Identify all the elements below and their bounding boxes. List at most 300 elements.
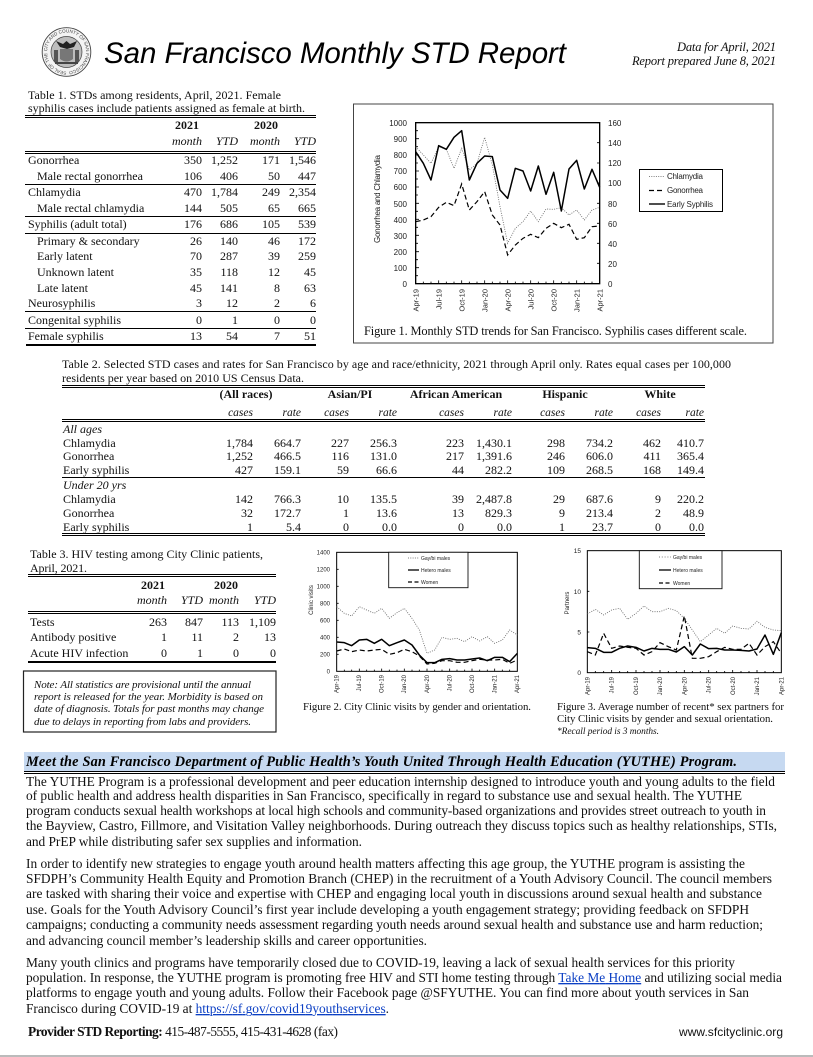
figure 1 x axis labels: Apr-19: [412, 289, 420, 312]
icon: city and county seal: SEAL OF THE CITY AND COUNTY OF SAN FRANCISCO: [44, 29, 90, 75]
report dates: [631, 40, 776, 68]
figure 1 left axis labels: 600: [394, 183, 408, 192]
row: Early syphilis all ages: 109: [547, 463, 565, 477]
figure 1 left axis labels: 700: [394, 167, 408, 176]
figure 3 caption: [557, 701, 784, 737]
article paragraph 2: use. Goals for the Youth Advisory Council’s first year include developing a youth engagement strategy; providing feedback on SFDPH: [26, 902, 749, 917]
figure 3 x axis labels: Apr-21: [780, 676, 786, 695]
figure 1 x axis labels: Oct-20: [550, 289, 558, 312]
row: Late latent: 8: [274, 281, 280, 295]
row: Gonorrhea under 20: 13: [452, 506, 464, 520]
row: Tests: 1,109: [249, 615, 276, 629]
figure 2 y axis labels: 1200: [317, 568, 331, 574]
row: Acute HIV infection: 0: [233, 646, 239, 660]
row: Chlamydia all ages: 410.7: [677, 436, 704, 450]
table 2 caption: Table 2. Selected STD cases and rates for San Francisco by age and race/ethnicity, 2021 through April only. Rates equal cases per 100,000: [62, 357, 731, 371]
row: Late latent: [37, 281, 316, 295]
table 2 column headers: cases: [324, 407, 350, 419]
row: Male rectal gonorrhea: Male rectal gonorrhea: [37, 169, 144, 183]
figure 3 y axis labels: [574, 548, 581, 677]
row: Gonorrhea under 20: 13.6: [376, 506, 397, 520]
row: Early syphilis under 20: [63, 520, 704, 534]
table 3 column headers: 2021: [141, 578, 165, 592]
figure 3 line chart: [587, 551, 781, 673]
figure 3 legend: Gay/bi males: [673, 555, 703, 561]
row: Chlamydia: 2,354: [289, 185, 316, 199]
figure 1 right axis labels: [608, 119, 622, 289]
table 2 column headers: rate: [685, 407, 704, 419]
figure 3 x axis labels: Jan-20: [658, 676, 664, 695]
table 2 group headers: Asian/PI: [328, 387, 373, 401]
table 3 column headers: YTD: [254, 593, 276, 607]
row: Acute HIV infection: Acute HIV infection: [30, 646, 128, 660]
figure 3 caption: Figure 3. Average number of recent* sex partners for: [557, 701, 784, 713]
row: Syphilis adult total: 105: [262, 217, 280, 231]
table 2 group headers: White: [644, 387, 676, 401]
table 2 group headers: [220, 387, 676, 401]
figure 3 x axis labels: Apr-19: [586, 676, 592, 695]
table 2 column headers: rate: [493, 407, 512, 419]
figure 1 x axis labels: Jan-21: [572, 289, 582, 312]
line: Early Syphilis: [416, 131, 600, 211]
row: Early syphilis all ages: 282.2: [485, 463, 512, 477]
row: Early syphilis all ages: 159.1: [274, 463, 301, 477]
row: Gonorrhea: 1,546: [289, 153, 316, 167]
figure 1 right axis labels: 60: [608, 220, 617, 229]
row: Male rectal gonorrhea: 447: [298, 169, 316, 183]
article paragraph 3: [26, 955, 782, 1016]
row: Chlamydia all ages: 462: [643, 436, 661, 450]
figure 2 y axis labels: [317, 550, 331, 676]
row: Unknown latent: 12: [268, 265, 280, 279]
row: Chlamydia under 20: 687.6: [586, 492, 613, 506]
row: Early syphilis under 20: 0.0: [497, 520, 512, 534]
row: Female syphilis: [28, 329, 316, 343]
callout: provisional statistics note: report is released for the year. Morbidity is based on: [34, 691, 264, 703]
figure 2 x axis labels: Apr-19: [334, 674, 340, 693]
article paragraph 2: In order to identify new strategies to engage youth around health matters affecting this age group, the YUTHE program is assisting the: [26, 856, 745, 871]
row: Gonorrhea all ages: 365.4: [677, 449, 704, 463]
table 3 caption: Table 3. HIV testing among City Clinic patients,: [30, 547, 263, 561]
figure 1 legend: Gonorrhea: [667, 186, 704, 195]
line: Gonorrhea: [416, 184, 600, 255]
section: Under 20 yrs: Under 20 yrs: [63, 478, 127, 492]
table 2 column headers: rate: [282, 407, 301, 419]
figure 2 x axis labels: Apr-21: [515, 674, 521, 693]
figure 2 legend: Hetero males: [421, 568, 451, 574]
line: Women: [337, 649, 517, 664]
figure 2 x axis labels: Apr-20: [425, 674, 431, 693]
figure 3 y axis title: Partners: [565, 592, 571, 614]
row: Early latent: 70: [190, 249, 202, 263]
row: Syphilis adult total: Syphilis (adult total): [28, 217, 127, 231]
row: Early syphilis all ages: 44: [452, 463, 464, 477]
row: Chlamydia all ages: 1,784: [226, 436, 253, 450]
table 3 column headers: 2020: [214, 578, 238, 592]
row: Syphilis adult total: 539: [298, 217, 316, 231]
figure 3 caption: City Clinic visits by gender and sexual orientation.: [557, 713, 773, 725]
figure 1 right axis labels: 160: [608, 119, 622, 128]
figure 2 y axis title: Clinic visits: [309, 585, 315, 615]
row: Primary and secondary: Primary & secondary: [37, 234, 140, 248]
row: Chlamydia under 20: 2,487.8: [476, 492, 512, 506]
row: Chlamydia under 20: 9: [655, 492, 661, 506]
table 1: STDs among residents: [25, 88, 316, 346]
figure 3 y axis labels: 0: [577, 670, 581, 677]
row: Chlamydia: 249: [262, 185, 280, 199]
row: Syphilis adult total: 176: [184, 217, 202, 231]
row: Congenital syphilis: Congenital syphilis: [28, 313, 121, 327]
figure 3 x axis labels: Oct-19: [634, 676, 640, 695]
figure 3 caption: *Recall period is 3 months.: [557, 727, 659, 737]
row: Gonorrhea all ages: 1,252: [226, 449, 253, 463]
article paragraph 1: the Bayview, Castro, Fillmore, and Visitation Valley neighborhoods. During outreach they discuss topics such as healthy relationships, STIs,: [26, 818, 777, 833]
line: Gay/bi males: [337, 607, 517, 653]
row: Early latent: [37, 249, 316, 263]
figure 3 y axis labels: 5: [577, 630, 581, 636]
row: Chlamydia under 20: 29: [553, 492, 565, 506]
figure 1 line chart: [416, 123, 600, 284]
row: Chlamydia all ages: 298: [547, 436, 565, 450]
row: Gonorrhea under 20: 32: [241, 506, 253, 520]
figure 2 x axis labels: Jul-20: [448, 674, 454, 691]
row: Chlamydia under 20: 766.3: [274, 492, 301, 506]
figure 3 y axis labels: 10: [574, 589, 581, 596]
row: Male rectal chlamydia: 65: [268, 201, 280, 215]
table 1 column headers: 2020: [254, 118, 278, 132]
figure 2 x axis labels: Jul-19: [357, 674, 363, 691]
row: Primary and secondary: 172: [298, 234, 316, 248]
row: Early syphilis under 20: 23.7: [592, 520, 613, 534]
figure 2 y axis labels: 0: [327, 670, 331, 676]
row: Congenital syphilis: 0: [310, 313, 316, 327]
figure 2 x axis labels: [334, 674, 521, 693]
table 1 column headers: month: [250, 134, 280, 148]
line: Women: [587, 616, 781, 658]
row: Neurosyphilis: [28, 296, 316, 310]
row: Antibody positive: 13: [264, 630, 276, 644]
row: Tests: 263: [149, 615, 167, 629]
row: Male rectal chlamydia: 144: [184, 201, 202, 215]
figure 2 y axis labels: 1400: [317, 550, 331, 556]
row: Chlamydia: 1,784: [211, 185, 238, 199]
table 2 group headers: Hispanic: [542, 387, 588, 401]
figure 2 y axis labels: 200: [320, 652, 331, 658]
figure 1 x axis labels: Apr-20: [504, 289, 512, 312]
table 3 caption: April, 2021.: [30, 561, 87, 575]
figure 2 y axis labels: 400: [320, 636, 331, 642]
table 2 group headers: (All races): [220, 387, 272, 401]
row: Unknown latent: Unknown latent: [37, 265, 115, 279]
row: Early syphilis all ages: 168: [643, 463, 661, 477]
figure 2 x axis labels: Oct-20: [470, 674, 476, 693]
figure 1 right axis labels: 20: [608, 260, 617, 269]
row: Early syphilis under 20: Early syphilis: [63, 520, 130, 534]
row: Congenital syphilis: 0: [274, 313, 280, 327]
article paragraph 1: program conducts sexual health workshops at local high schools and community-based organizations and provides street outreach to youth in: [26, 803, 766, 818]
row: Gonorrhea under 20: [63, 506, 704, 520]
table 2 caption: [62, 357, 731, 385]
row: Gonorrhea under 20: 829.3: [485, 506, 512, 520]
row: Early syphilis all ages: [63, 463, 704, 477]
row: Early syphilis all ages: 66.6: [376, 463, 397, 477]
row: Early syphilis all ages: 268.5: [586, 463, 613, 477]
figure 1 x axis labels: Jul-19: [434, 289, 444, 309]
row: Chlamydia under 20: 10: [337, 492, 349, 506]
figure 1 caption: Figure 1. Monthly STD trends for San Francisco. Syphilis cases different scale.: [364, 324, 747, 338]
callout: provisional statistics note: [24, 671, 276, 732]
figure 2 line chart: [337, 552, 517, 671]
row: Neurosyphilis: 3: [196, 296, 202, 310]
figure 2 legend: [389, 552, 468, 588]
table 1 column headers: YTD: [216, 134, 238, 148]
figure 1 right axis labels: 100: [608, 179, 622, 188]
article paragraph 1: The YUTHE Program is a professional development and peer education internship designed to introduce youth and young adults to the field: [26, 774, 775, 789]
table 3 caption: [30, 547, 263, 575]
row: Male rectal chlamydia: Male rectal chlamydia: [37, 201, 145, 215]
row: Gonorrhea: [28, 153, 316, 167]
row: Chlamydia under 20: Chlamydia: [63, 492, 116, 506]
table 1 column headers: YTD: [294, 134, 316, 148]
table 2 column headers: rate: [594, 407, 613, 419]
table 2 column headers: cases: [540, 407, 566, 419]
row: Male rectal gonorrhea: 406: [220, 169, 238, 183]
figure 3 x axis labels: Apr-20: [682, 676, 688, 695]
row: Congenital syphilis: 0: [196, 313, 202, 327]
row: Neurosyphilis: 12: [226, 296, 238, 310]
article paragraph 3: Many youth clinics and programs have temporarily closed due to COVID-19, leaving a lack of sexual health services for this priority: [26, 955, 735, 970]
row: Female syphilis: 51: [304, 329, 316, 343]
row: Male rectal gonorrhea: 106: [184, 169, 202, 183]
row: Primary and secondary: 26: [190, 234, 202, 248]
figure 3 x axis labels: Oct-20: [731, 676, 737, 695]
figure 2 legend: Women: [421, 580, 438, 586]
figure 3 x axis labels: Jan-21: [755, 676, 761, 695]
figure 1 left axis labels: 100: [394, 264, 408, 273]
figure 1 left axis labels: 800: [394, 151, 408, 160]
article paragraph 2: and advancing council member’s leadership skills and career opportunities.: [26, 933, 427, 948]
figure 2 y axis labels: 800: [320, 602, 331, 608]
row: Antibody positive: [30, 630, 276, 644]
report dates: Report prepared June 8, 2021: [631, 54, 776, 68]
row: Acute HIV infection: 0: [270, 646, 276, 660]
figure 3 x axis labels: Jul-20: [706, 676, 712, 693]
row: Early syphilis under 20: 0: [458, 520, 464, 534]
row: Primary and secondary: 46: [268, 234, 280, 248]
row: Early syphilis all ages: 149.4: [677, 463, 704, 477]
article paragraph 1: of public health and address health disparities in San Francisco, specifically in regard to substance use and sexual health. The YUTHE: [26, 788, 742, 803]
figure 3 x axis labels: Jul-19: [610, 676, 616, 693]
figure 1 right axis labels: 40: [608, 240, 617, 249]
row: Early latent: Early latent: [37, 249, 93, 263]
row: Female syphilis: 7: [274, 329, 280, 343]
figure 1 left axis labels: [389, 119, 408, 289]
row: Late latent: 141: [220, 281, 238, 295]
row: Gonorrhea: 1,252: [211, 153, 238, 167]
row: Early latent: 287: [220, 249, 238, 263]
article paragraph 3: Francisco during COVID-19 at https://sf.gov/covid19youthservices.: [26, 1001, 389, 1016]
row: Male rectal chlamydia: 665: [298, 201, 316, 215]
row: Congenital syphilis: [28, 313, 316, 327]
figure 1 left axis labels: 200: [394, 248, 408, 257]
row: Chlamydia all ages: 223: [446, 436, 464, 450]
row: Syphilis adult total: 686: [220, 217, 238, 231]
row: Gonorrhea: 350: [184, 153, 202, 167]
row: Tests: 113: [221, 615, 239, 629]
article heading banner: [24, 752, 785, 774]
article paragraph 3: population. In response, the YUTHE program is promoting free HIV and STI home testing through Take Me Home and utilizing social media: [26, 970, 782, 985]
figure 1 left axis labels: 400: [394, 216, 408, 225]
figure 1 right axis labels: 80: [608, 200, 617, 209]
article paragraph 2: campaigns; conducting a community needs assessment regarding youth needs around sexual health and substance use and harm reduction;: [26, 917, 763, 932]
figure 1 left axis labels: 500: [394, 200, 408, 209]
row: Syphilis adult total: [28, 217, 316, 231]
article paragraph 2: are tasked with sharing their voice and expertise with CHEP and engaging local youth in discussions around sexual health and substance: [26, 886, 762, 901]
row: Chlamydia all ages: 256.3: [370, 436, 397, 450]
figure 1 y axis title: Gonorrhea and Chlamydia: [373, 154, 382, 243]
table 1 column headers: 2021: [175, 118, 199, 132]
row: Early syphilis under 20: 0.0: [382, 520, 397, 534]
row: Gonorrhea: Gonorrhea: [28, 153, 80, 167]
row: Acute HIV infection: 1: [197, 646, 203, 660]
callout: provisional statistics note: Note: All statistics are provisional until the annual: [33, 679, 251, 691]
figure 3 x axis labels: [586, 676, 786, 695]
row: Chlamydia all ages: 664.7: [274, 436, 301, 450]
row: Gonorrhea all ages: 131.0: [370, 449, 397, 463]
row: Gonorrhea under 20: Gonorrhea: [63, 506, 115, 520]
figure 2 x axis labels: Oct-19: [380, 674, 386, 693]
row: Chlamydia under 20: 142: [235, 492, 253, 506]
table 3 column headers: [137, 578, 276, 607]
table 2: STD cases and rates by age and race: [62, 357, 731, 536]
figure 2 legend: Gay/bi males: [421, 556, 451, 562]
row: Gonorrhea all ages: 1,391.6: [476, 449, 512, 463]
row: Primary and secondary: 140: [220, 234, 238, 248]
row: Neurosyphilis: Neurosyphilis: [28, 296, 96, 310]
row: Chlamydia: [28, 185, 316, 199]
table 3 column headers: month: [137, 593, 167, 607]
row: Unknown latent: [37, 265, 316, 279]
figure 3 legend: [639, 551, 722, 589]
row: Early latent: 259: [298, 249, 316, 263]
article paragraph 3: platforms to engage youth and young adults. Follow their Facebook page @SFYUTHE. You can find more about youth services in San: [26, 985, 749, 1000]
report dates: Data for April, 2021: [676, 40, 776, 54]
row: Chlamydia: 470: [184, 185, 202, 199]
article paragraph 1: and PrEP while distributing safer sex supplies and information.: [26, 834, 362, 849]
row: Chlamydia all ages: 734.2: [586, 436, 613, 450]
table 2 column headers: cases: [636, 407, 662, 419]
table 1 caption: Table 1. STDs among residents, April, 2021. Female: [28, 88, 281, 102]
row: Chlamydia all ages: Chlamydia: [63, 436, 116, 450]
row: Tests: 847: [185, 615, 203, 629]
footer: provider reporting: Provider STD Reporting: 415-487-5555, 415-431-4628 (fax): [28, 1024, 338, 1039]
figure 2 caption: Figure 2. City Clinic visits by gender and orientation.: [303, 701, 531, 713]
title: San Francisco Monthly STD Report: [104, 37, 568, 70]
callout: provisional statistics note: date of diagnosis. Totals for past months may change: [34, 703, 264, 715]
figure 1 right axis labels: 0: [608, 280, 613, 289]
figure 1 legend: Chlamydia: [667, 172, 704, 181]
figure 3 legend: Hetero males: [673, 568, 703, 574]
row: Unknown latent: 118: [220, 265, 238, 279]
row: Male rectal chlamydia: 505: [220, 201, 238, 215]
row: Early syphilis under 20: 1: [559, 520, 565, 534]
row: Early syphilis all ages: Early syphilis: [63, 463, 130, 477]
figure 1 left axis labels: 1000: [389, 119, 408, 128]
row: Early latent: 39: [268, 249, 280, 263]
row: Male rectal gonorrhea: 50: [268, 169, 280, 183]
figure 1 left axis labels: 300: [394, 232, 408, 241]
figure 2 x axis labels: Jan-20: [402, 674, 408, 693]
line: Gay/bi males: [587, 606, 781, 642]
figure 1 legend: Early Syphilis: [667, 200, 713, 209]
figure 1 x axis labels: [412, 289, 604, 312]
row: Early syphilis under 20: 5.4: [286, 520, 301, 534]
row: Chlamydia all ages: 1,430.1: [476, 436, 512, 450]
row: Gonorrhea under 20: 2: [655, 506, 661, 520]
row: Chlamydia under 20: 135.5: [370, 492, 397, 506]
table 2 column headers: rate: [378, 407, 397, 419]
row: Tests: [30, 615, 276, 629]
row: Gonorrhea under 20: 213.4: [586, 506, 613, 520]
row: Primary and secondary: [37, 234, 316, 248]
row: Chlamydia all ages: 227: [331, 436, 349, 450]
row: Antibody positive: 11: [191, 630, 203, 644]
footer: website: www.sfcityclinic.org: [678, 1025, 783, 1039]
row: Gonorrhea all ages: 466.5: [274, 449, 301, 463]
table 3: HIV testing: [28, 547, 276, 663]
section: All ages: All ages: [62, 422, 102, 436]
table 3 column headers: YTD: [181, 593, 203, 607]
figure 2 x axis labels: Jan-21: [492, 674, 498, 693]
figure 1 legend: [640, 170, 722, 212]
table 2 caption: residents per year based on 2010 US Census Data.: [62, 371, 304, 385]
table 2 column headers: cases: [228, 407, 254, 419]
row: Female syphilis: Female syphilis: [28, 329, 104, 343]
line: Chlamydia: [416, 137, 600, 243]
panel: YUTHE program article: [24, 752, 785, 1016]
row: Gonorrhea all ages: 606.0: [586, 449, 613, 463]
row: Early syphilis all ages: 59: [337, 463, 349, 477]
callout: provisional statistics note: due to delays in reporting from labs and providers.: [34, 716, 251, 728]
figure 1 right axis labels: 120: [608, 159, 622, 168]
figure 1 x axis labels: Jan-20: [480, 289, 490, 312]
table 1 caption: syphilis cases include patients assigned as female at birth.: [28, 101, 305, 115]
row: Gonorrhea all ages: 246: [547, 449, 565, 463]
row: Antibody positive: 1: [161, 630, 167, 644]
row: Chlamydia all ages: [63, 436, 704, 450]
row: Early syphilis under 20: 0: [655, 520, 661, 534]
row: Female syphilis: 13: [190, 329, 202, 343]
row: Early syphilis under 20: 0: [343, 520, 349, 534]
row: Early syphilis under 20: 0.0: [689, 520, 704, 534]
row: Late latent: 45: [190, 281, 202, 295]
row: Gonorrhea under 20: 172.7: [274, 506, 301, 520]
row: Chlamydia: Chlamydia: [28, 185, 81, 199]
row: Gonorrhea: 171: [262, 153, 280, 167]
row: Late latent: 63: [304, 281, 316, 295]
table 1 caption: [28, 88, 305, 115]
table 2 group headers: African American: [410, 387, 502, 401]
figure 3 legend: Women: [673, 581, 690, 587]
row: Tests: Tests: [30, 615, 55, 629]
figure 1 x axis labels: Oct-19: [458, 289, 466, 312]
row: Gonorrhea all ages: 116: [331, 449, 349, 463]
row: Early syphilis under 20: 1: [247, 520, 253, 534]
row: Gonorrhea under 20: 9: [559, 506, 565, 520]
row: Male rectal chlamydia: [37, 201, 316, 215]
figure 1 left axis labels: 900: [394, 135, 408, 144]
row: Antibody positive: Antibody positive: [30, 630, 116, 644]
